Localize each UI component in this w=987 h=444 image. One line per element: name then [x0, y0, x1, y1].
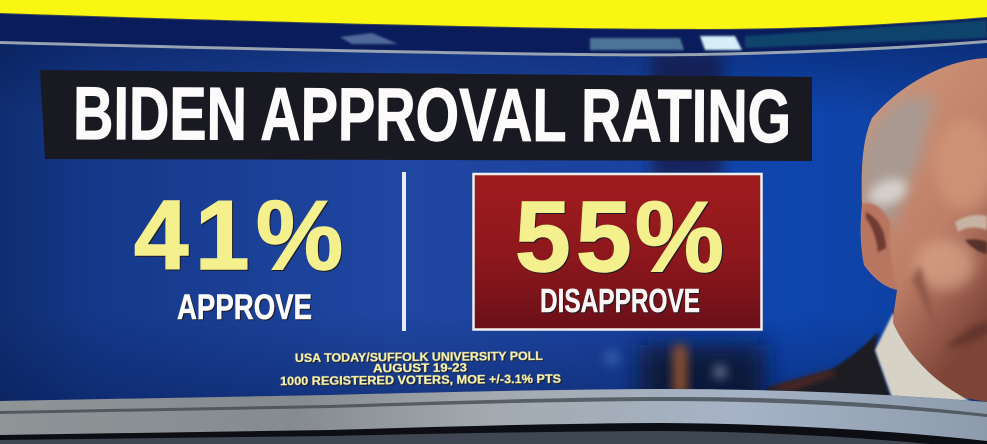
dark base strip	[0, 423, 987, 444]
eye	[965, 239, 987, 254]
eyebrow	[955, 215, 987, 232]
ear	[860, 203, 898, 292]
grey floor below strip	[0, 431, 930, 444]
disapprove panel	[474, 174, 762, 330]
white hair highlight	[865, 173, 911, 211]
yellow top banner	[0, 0, 987, 29]
poll source note: USA TODAY/SUFFOLK UNIVERSITY POLL	[295, 349, 543, 365]
suit sleeve highlight	[767, 370, 838, 392]
forehead highlight	[935, 120, 987, 210]
photo: man in suit with head bowed	[767, 55, 987, 405]
poll source note	[280, 349, 561, 388]
inner ear shadow	[866, 212, 886, 252]
disapprove percentage: 55%	[515, 181, 724, 293]
silver rail	[0, 40, 987, 57]
collar	[875, 313, 970, 402]
cheek highlight	[915, 240, 975, 290]
poll source note: 1000 REGISTERED VOTERS, MOE +/-3.1% PTS	[280, 372, 561, 388]
disapprove label: DISAPPROVE	[540, 282, 700, 319]
silver lower frame	[0, 389, 987, 444]
grey hair	[860, 95, 935, 225]
highlight reflections in dark band	[340, 20, 987, 50]
approve percentage: 41%	[134, 180, 343, 290]
mouth shadow	[945, 322, 987, 348]
approve figure	[134, 180, 343, 327]
frame groove line	[0, 397, 987, 417]
title bar	[40, 70, 812, 161]
approve label: APPROVE	[177, 288, 312, 327]
cheek crease	[910, 266, 932, 316]
divider	[402, 172, 406, 331]
head	[855, 55, 987, 405]
blurred flag and figure behind panel	[604, 50, 765, 415]
suit	[767, 332, 892, 402]
poll source note: AUGUST 19-23	[373, 361, 467, 375]
dark band under banner	[0, 14, 987, 56]
